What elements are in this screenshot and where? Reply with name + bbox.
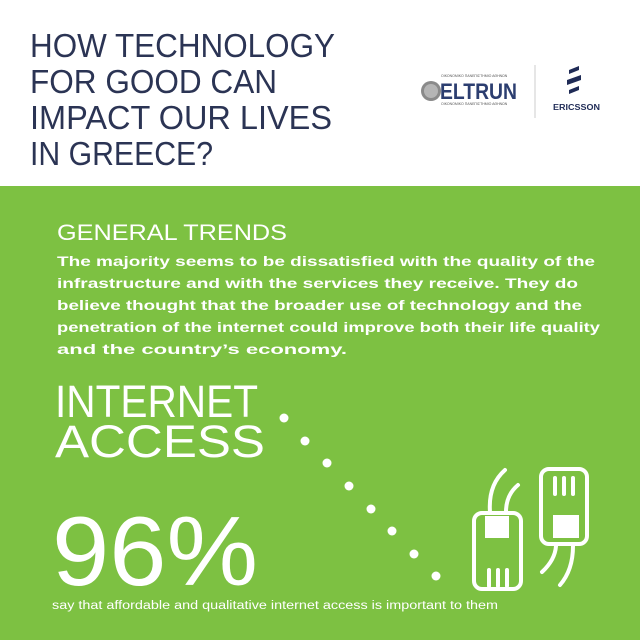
text block: trends paragraph: and the country’s economy. <box>57 341 347 357</box>
green panel <box>0 186 640 640</box>
title <box>30 27 335 172</box>
text block: trends paragraph: penetration of the internet could improve both their life quality <box>57 319 600 335</box>
heading: internet access: ACCESS <box>55 416 265 467</box>
heading: general trends: GENERAL TRENDS <box>57 220 287 245</box>
text block: trends paragraph: infrastructure and with the services they receive. They do <box>57 275 578 291</box>
logo: Ericsson <box>553 66 600 112</box>
title: FOR GOOD CAN <box>30 63 277 100</box>
logo: ELTRUN: ΟΙΚΟΝΟΜΙΚΟ ΠΑΝΕΠΙΣΤΗΜΙΟ ΑΘΗΝΩΝ <box>441 74 508 78</box>
title: IMPACT OUR LIVES <box>30 99 332 136</box>
text block: trends paragraph: The majority seems to be dissatisfied with the quality of the <box>57 253 595 269</box>
icon: ethernet plugs <box>474 469 587 589</box>
stat: 96%: 96% <box>52 496 258 606</box>
logo: ELTRUN: ΟΙΚΟΝΟΜΙΚΟ ΠΑΝΕΠΙΣΤΗΜΙΟ ΑΘΗΝΩΝ <box>441 102 508 106</box>
header panel <box>0 0 640 186</box>
title: IN GREECE? <box>30 135 213 172</box>
text block: trends paragraph: believe thought that the broader use of technology and the <box>57 297 582 313</box>
heading: internet access: INTERNET <box>55 376 258 427</box>
dotted line <box>280 414 440 580</box>
logo: Ericsson: ERICSSON <box>553 103 600 112</box>
title: HOW TECHNOLOGY <box>30 27 335 64</box>
logo: ELTRUN <box>421 74 517 106</box>
heading: internet access <box>55 376 265 467</box>
caption: say that affordable and qualitative internet access is important to them <box>52 600 498 612</box>
logo: ELTRUN: ELTRUN <box>440 79 517 104</box>
text block: trends paragraph <box>57 253 600 357</box>
